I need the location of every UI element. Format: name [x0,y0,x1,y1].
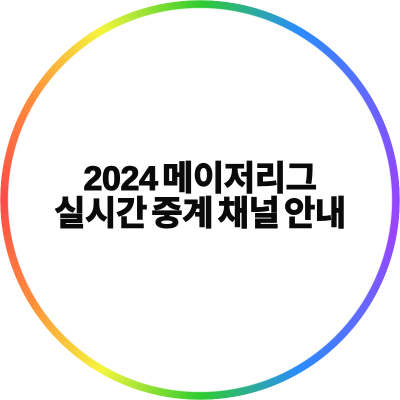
title [54,160,346,233]
title: 실시간 중계 채널 안내 [54,195,346,233]
title: 2024 메이저리그 [84,160,316,198]
